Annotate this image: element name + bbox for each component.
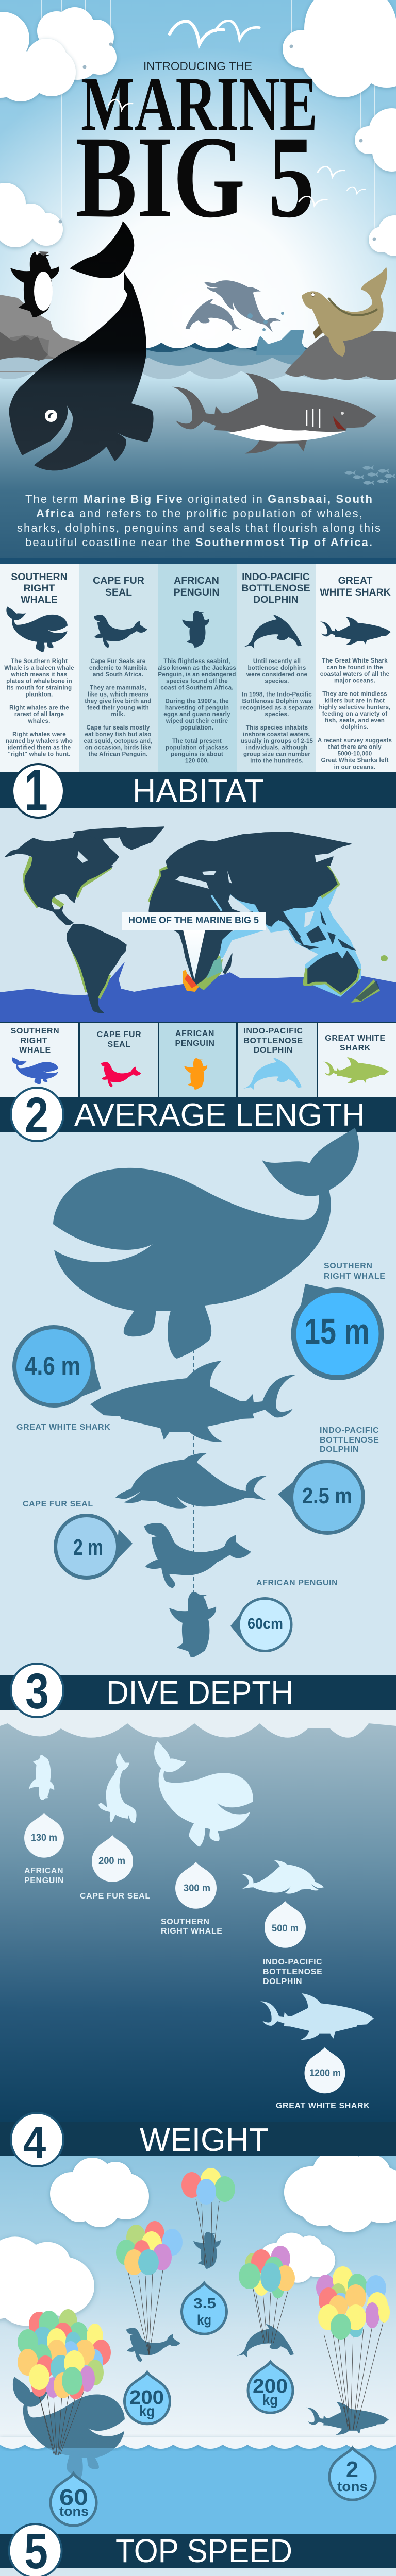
panel: top speed	[0, 2568, 396, 2576]
card: great white shark	[318, 575, 392, 770]
dive: southern right whale: RIGHT WHALE	[161, 1927, 222, 1936]
card: african penguin: harvesting of penguin	[165, 704, 229, 711]
card: cape fur seal: eat squid, octopus and,	[84, 738, 152, 744]
legend: southern right whale: WHALE	[19, 1046, 51, 1055]
dive: southern right whale	[137, 1741, 261, 1936]
drop: 200 kg: kg	[139, 2403, 155, 2420]
card: cape fur seal: and South Africa.	[93, 671, 143, 678]
dive: african penguin	[24, 1755, 64, 1885]
card: southern right whale: The Southern Right	[11, 658, 68, 665]
label: southern right whale: SOUTHERN	[324, 1262, 373, 1270]
card: cape fur seal: like us, which means	[88, 691, 148, 698]
banner: 2 average length: 2	[25, 1088, 48, 1144]
legend: southern right whale: RIGHT	[21, 1037, 47, 1045]
card: indo-pacific bottlenose dolphin: species.	[265, 711, 289, 718]
card: great white shark: highly selective hunters,	[319, 704, 391, 710]
card: cape fur seal: they give live birth and	[85, 698, 152, 704]
banner: 1 habitat	[0, 758, 396, 823]
card: great white shark: dolphins.	[341, 724, 368, 731]
card: indo-pacific bottlenose dolphin: INDO-PACIFIC	[242, 571, 310, 583]
clouds	[0, 2149, 396, 2326]
banner: 3 dive depth: DIVE DEPTH	[106, 1674, 293, 1711]
card: indo-pacific bottlenose dolphin: usually in groups of 2-15	[241, 738, 314, 744]
card: african penguin: also known as the Jackass	[158, 665, 236, 671]
label: southern right whale: RIGHT WHALE	[324, 1272, 385, 1281]
card: cape fur seal: CAPE FUR	[93, 575, 144, 586]
card: southern right whale: plankton.	[26, 691, 53, 698]
panel: average length background	[0, 1132, 396, 1675]
card: indo-pacific bottlenose dolphin: recognised as a separate	[240, 704, 314, 711]
card: indo-pacific bottlenose dolphin: DOLPHIN	[253, 594, 299, 605]
card: indo-pacific bottlenose dolphin	[240, 571, 314, 765]
drop: 200 kg: 200	[253, 2376, 288, 2397]
panel: habitat legend	[0, 1022, 396, 1097]
great white shark	[172, 373, 376, 453]
legend: southern right whale: SOUTHERN	[11, 1027, 59, 1036]
bubble: 15 m	[294, 1284, 382, 1378]
card: indo-pacific bottlenose dolphin: group size can number	[243, 751, 310, 758]
card: african penguin: population of jackass	[166, 744, 228, 751]
sky glow	[0, 0, 396, 348]
card: cape fur seal: the African Penguin.	[88, 751, 148, 758]
dive: southern right whale: 300 m	[184, 1883, 210, 1894]
panel: habitat map	[0, 808, 396, 1023]
intro text: beautiful coastline near the Southernmost Tip of Africa.	[25, 536, 372, 549]
divider strip	[0, 558, 396, 564]
bubble: 60 cm	[230, 1598, 291, 1651]
card: indo-pacific bottlenose dolphin: Bottlenose Dolphin was	[242, 698, 311, 704]
water surface	[0, 1710, 396, 1738]
panel: dive depth water	[0, 1710, 396, 2122]
label: bottlenose dolphin: BOTTLENOSE	[320, 1436, 379, 1445]
bubble: 4.6 m	[14, 1327, 101, 1405]
bubble: 2.5 m	[278, 1461, 363, 1533]
card: african penguin: penguins is about	[171, 751, 223, 758]
dive: african penguin: 130 m	[31, 1833, 57, 1843]
legend: african penguin	[175, 1029, 215, 1090]
card: african penguin: species found off the	[166, 678, 228, 685]
card: great white shark: that there are only	[328, 744, 382, 751]
legend: indo-pacific bottlenose dolphin: BOTTLENOSE	[243, 1037, 303, 1045]
banner: 4 weight: 4	[23, 2117, 46, 2167]
title	[75, 60, 318, 242]
intro text: The term Marine Big Five originated in Gansbaai, South	[25, 493, 372, 505]
black whale diving	[9, 221, 154, 470]
map: inland seas	[77, 851, 315, 927]
card: great white shark: WHITE SHARK	[320, 587, 391, 598]
birds	[108, 21, 365, 206]
card: indo-pacific bottlenose dolphin: This species inhabits	[246, 724, 308, 731]
legend: cape fur seal: SEAL	[107, 1040, 131, 1049]
card: african penguin: Penguin, is an endangered	[158, 671, 236, 678]
dive: great white shark: 1200 m	[309, 2068, 341, 2079]
whale	[53, 1128, 359, 1359]
legend: indo-pacific bottlenose dolphin	[243, 1027, 303, 1090]
card: cape fur seal: SEAL	[105, 587, 132, 598]
card: indo-pacific bottlenose dolphin: inshore coastal waters,	[243, 731, 311, 738]
card: great white shark: can be found in the	[326, 664, 383, 671]
label: bottlenose dolphin: DOLPHIN	[320, 1445, 359, 1454]
card: great white shark: fish, seals, and even	[325, 717, 385, 724]
map: dolphin zone	[219, 876, 361, 997]
drop: 200 kg: 200	[129, 2387, 164, 2409]
legend: great white shark	[323, 1034, 389, 1083]
sky	[0, 0, 396, 348]
card: african penguin: population.	[180, 724, 213, 731]
banner: 5 top speed: TOP SPEED	[116, 2532, 292, 2569]
dolphins leaping	[186, 262, 289, 336]
water surface	[0, 2437, 396, 2449]
drop: 60 tons	[51, 2473, 96, 2526]
banner: 2 average length: AVERAGE LENGTH	[74, 1097, 365, 1133]
label: great white shark: GREAT WHITE SHARK	[16, 1423, 110, 1432]
banner: 2 average length	[0, 1088, 396, 1144]
dive: bottlenose dolphin: INDO-PACIFIC	[263, 1958, 322, 1967]
legend: african penguin: AFRICAN	[175, 1029, 214, 1038]
legend: cape fur seal	[97, 1030, 141, 1087]
banner: 4 weight	[0, 2113, 396, 2167]
card: southern right whale: identified them as the	[8, 744, 71, 751]
card: cape fur seal: feed their young with	[87, 704, 149, 711]
card: southern right whale: Right whales are the	[9, 704, 69, 711]
card: cape fur seal: eat boney fish but also	[85, 731, 152, 738]
card: cape fur seal: They are mammals,	[90, 685, 146, 691]
legend: indo-pacific bottlenose dolphin: INDO-PACIFIC	[243, 1027, 303, 1036]
drop: 2 tons	[329, 2448, 375, 2500]
drop: 2 tons: 2	[346, 2457, 358, 2482]
card: southern right whale: plates of whalebone in	[6, 678, 72, 685]
map: south africa penguin and seal zones	[183, 957, 223, 992]
card: cape fur seal: Cape fur seals mostly	[87, 724, 150, 731]
card: southern right whale: Right whales were	[12, 731, 66, 738]
legend: african penguin: PENGUIN	[175, 1039, 215, 1048]
card: cape fur seal: milk.	[111, 711, 125, 718]
card: great white shark: GREAT	[338, 575, 372, 586]
panel: species cards	[0, 564, 396, 772]
card: african penguin: This flightless seabird,	[163, 658, 230, 665]
rocks: left	[0, 295, 103, 372]
seal	[144, 1523, 251, 1588]
callout: home of the marine big 5	[122, 912, 266, 979]
intro text: sharks, dolphins, penguins and seals that flourish along this	[17, 521, 381, 534]
drop: 2 tons: tons	[337, 2479, 368, 2494]
card: southern right whale: which means it has	[10, 671, 68, 678]
bubble: 60 cm: 60cm	[248, 1616, 283, 1632]
card: southern right whale: SOUTHERN	[11, 571, 68, 583]
legend: great white shark: GREAT WHITE	[325, 1034, 386, 1043]
card: southern right whale: named by whalers who	[6, 738, 73, 744]
card: cape fur seal: Cape Fur Seals are	[90, 658, 146, 665]
dive: cape fur seal	[80, 1753, 151, 1901]
card: indo-pacific bottlenose dolphin: Until recently all	[253, 658, 301, 665]
card: indo-pacific bottlenose dolphin: individuals, although	[246, 744, 308, 751]
card: great white shark: feeding on a variety of	[322, 710, 387, 717]
card: african penguin: eggs and guano nearly	[163, 711, 230, 718]
card: great white shark: A recent survey suggests	[318, 737, 392, 744]
splash	[248, 312, 309, 355]
dolphin with balloons	[237, 2246, 295, 2413]
card: indo-pacific bottlenose dolphin: into the hundreds.	[250, 757, 304, 765]
drop: 3.5 kg	[182, 2283, 227, 2334]
drop: 200 kg	[248, 2362, 293, 2413]
clouds	[0, 0, 396, 256]
banner: 1 habitat: 1	[24, 758, 48, 823]
heading: introducing the: INTRODUCING THE	[143, 60, 252, 73]
drop: 60 tons: 60	[59, 2485, 88, 2510]
bubble: 2 m: 2 m	[73, 1535, 103, 1560]
intro text	[17, 493, 381, 549]
whale with balloons	[13, 2309, 125, 2526]
dive: cape fur seal: 200 m	[98, 1856, 125, 1867]
card: african penguin	[158, 575, 236, 765]
map: shark coast	[25, 857, 358, 998]
strings	[41, 0, 374, 238]
string beads	[59, 42, 376, 241]
map: whale zone	[0, 962, 396, 1023]
bubble: 15 m: 15 m	[304, 1311, 370, 1351]
card: southern right whale: whales.	[28, 718, 50, 724]
card: indo-pacific bottlenose dolphin: species.	[265, 678, 289, 685]
fish school	[344, 465, 395, 485]
dive: bottlenose dolphin: DOLPHIN	[263, 1977, 302, 1986]
drop: 200 kg	[125, 2372, 170, 2424]
drop: 3.5 kg: 3.5	[193, 2295, 216, 2311]
card: african penguin: 120 000.	[185, 757, 209, 765]
card: southern right whale	[4, 571, 74, 758]
drop: 200 kg: kg	[262, 2392, 278, 2409]
dive: bottlenose dolphin: 500 m	[272, 1923, 299, 1934]
intro text: Africa and refers to the prolific population of whales,	[36, 507, 362, 520]
scale line	[193, 1349, 194, 1592]
bubble: 2 m	[56, 1516, 133, 1578]
card: african penguin: AFRICAN	[174, 575, 219, 586]
heading: big 5: BIG 5	[75, 112, 315, 242]
card: indo-pacific bottlenose dolphin: bottlenose dolphins	[248, 665, 306, 671]
legend: indo-pacific bottlenose dolphin: DOLPHIN	[254, 1046, 293, 1055]
card: cape fur seal: endemic to Namibia	[89, 665, 147, 671]
dive: bottlenose dolphin: BOTTLENOSE	[263, 1968, 322, 1976]
dive: bottlenose dolphin	[242, 1860, 324, 1986]
card: african penguin: The total present	[172, 738, 222, 744]
banner: 1 habitat: HABITAT	[133, 772, 264, 809]
dive: african penguin: PENGUIN	[24, 1876, 64, 1885]
shark	[90, 1361, 296, 1442]
card: great white shark: Great White Sharks left	[321, 757, 389, 764]
dive: great white shark: GREAT WHITE SHARK	[276, 2102, 370, 2110]
dive: southern right whale: SOUTHERN	[161, 1918, 210, 1926]
card: southern right whale: RIGHT	[24, 583, 55, 594]
penguin with balloons	[182, 2168, 235, 2334]
map: continents	[5, 827, 379, 1013]
card: southern right whale: "right" whale to hunt.	[8, 751, 71, 758]
card: great white shark: major oceans.	[334, 677, 375, 684]
legend: southern right whale	[11, 1027, 59, 1084]
card: cape fur seal	[84, 575, 152, 758]
chart: average length	[14, 1128, 385, 1657]
card: african penguin: PENGUIN	[174, 587, 219, 598]
penguin on rock	[10, 251, 59, 317]
card: african penguin: wiped out their entire	[166, 718, 228, 724]
wave layers	[0, 330, 396, 379]
label: african penguin: AFRICAN PENGUIN	[256, 1579, 338, 1587]
rock: right	[285, 330, 396, 380]
card: southern right whale: Whale is a baleen whale	[4, 665, 74, 671]
heading: marine: MARINE	[81, 61, 318, 147]
seal on rock	[302, 267, 387, 357]
water	[0, 2445, 396, 2534]
card: cape fur seal: on occasion, birds like	[85, 744, 152, 751]
seal with balloons	[116, 2221, 183, 2424]
dive: great white shark	[260, 1993, 374, 2110]
panel: weight	[0, 2149, 396, 2534]
card: indo-pacific bottlenose dolphin: BOTTLENOSE	[241, 583, 310, 594]
banner: 4 weight: WEIGHT	[140, 2121, 269, 2158]
card: great white shark: in our oceans.	[334, 764, 375, 770]
card: great white shark: The Great White Shark	[322, 657, 388, 664]
shark with balloons	[306, 2266, 390, 2500]
water gradient	[0, 340, 396, 558]
card: great white shark: coastal waters of all the	[320, 671, 390, 677]
banner: 3 dive depth: 3	[25, 1664, 49, 1720]
dolphin	[116, 1453, 268, 1509]
card: indo-pacific bottlenose dolphin: were considered one	[246, 671, 307, 678]
drop: 3.5 kg: kg	[197, 2312, 211, 2328]
map: red sea	[211, 895, 222, 911]
callout: home of the marine big 5: HOME OF THE MARINE BIG 5	[128, 915, 259, 925]
bubble: 4.6 m: 4.6 m	[25, 1351, 80, 1380]
card: great white shark: They are not mindless	[322, 690, 387, 698]
legend: cape fur seal: CAPE FUR	[97, 1030, 141, 1039]
banner: 3 dive depth	[0, 1664, 396, 1720]
dive: african penguin: AFRICAN	[24, 1867, 63, 1875]
label: bottlenose dolphin: INDO-PACIFIC	[320, 1426, 379, 1435]
card: southern right whale: rarest of all large	[14, 711, 64, 718]
card: southern right whale: its mouth for straining	[7, 685, 72, 691]
card: indo-pacific bottlenose dolphin: In 1998, the Indo-Pacific	[242, 691, 312, 698]
bubble: 2.5 m: 2.5 m	[302, 1483, 352, 1509]
legend: great white shark: SHARK	[340, 1044, 371, 1053]
label: cape fur seal: CAPE FUR SEAL	[23, 1500, 93, 1509]
card: southern right whale: WHALE	[21, 594, 58, 605]
panel: hero scene	[0, 0, 396, 558]
drop: 60 tons: tons	[59, 2503, 89, 2519]
card: african penguin: During the 1900's, the	[165, 698, 229, 704]
card: great white shark: 5000-10,000	[338, 751, 372, 757]
card: great white shark: killers but are in fact	[325, 697, 385, 704]
penguin	[169, 1592, 216, 1657]
dive: cape fur seal: CAPE FUR SEAL	[80, 1892, 151, 1901]
card: african penguin: coast of Southern Africa.	[160, 685, 234, 691]
banner: 5 top speed	[0, 2524, 396, 2576]
